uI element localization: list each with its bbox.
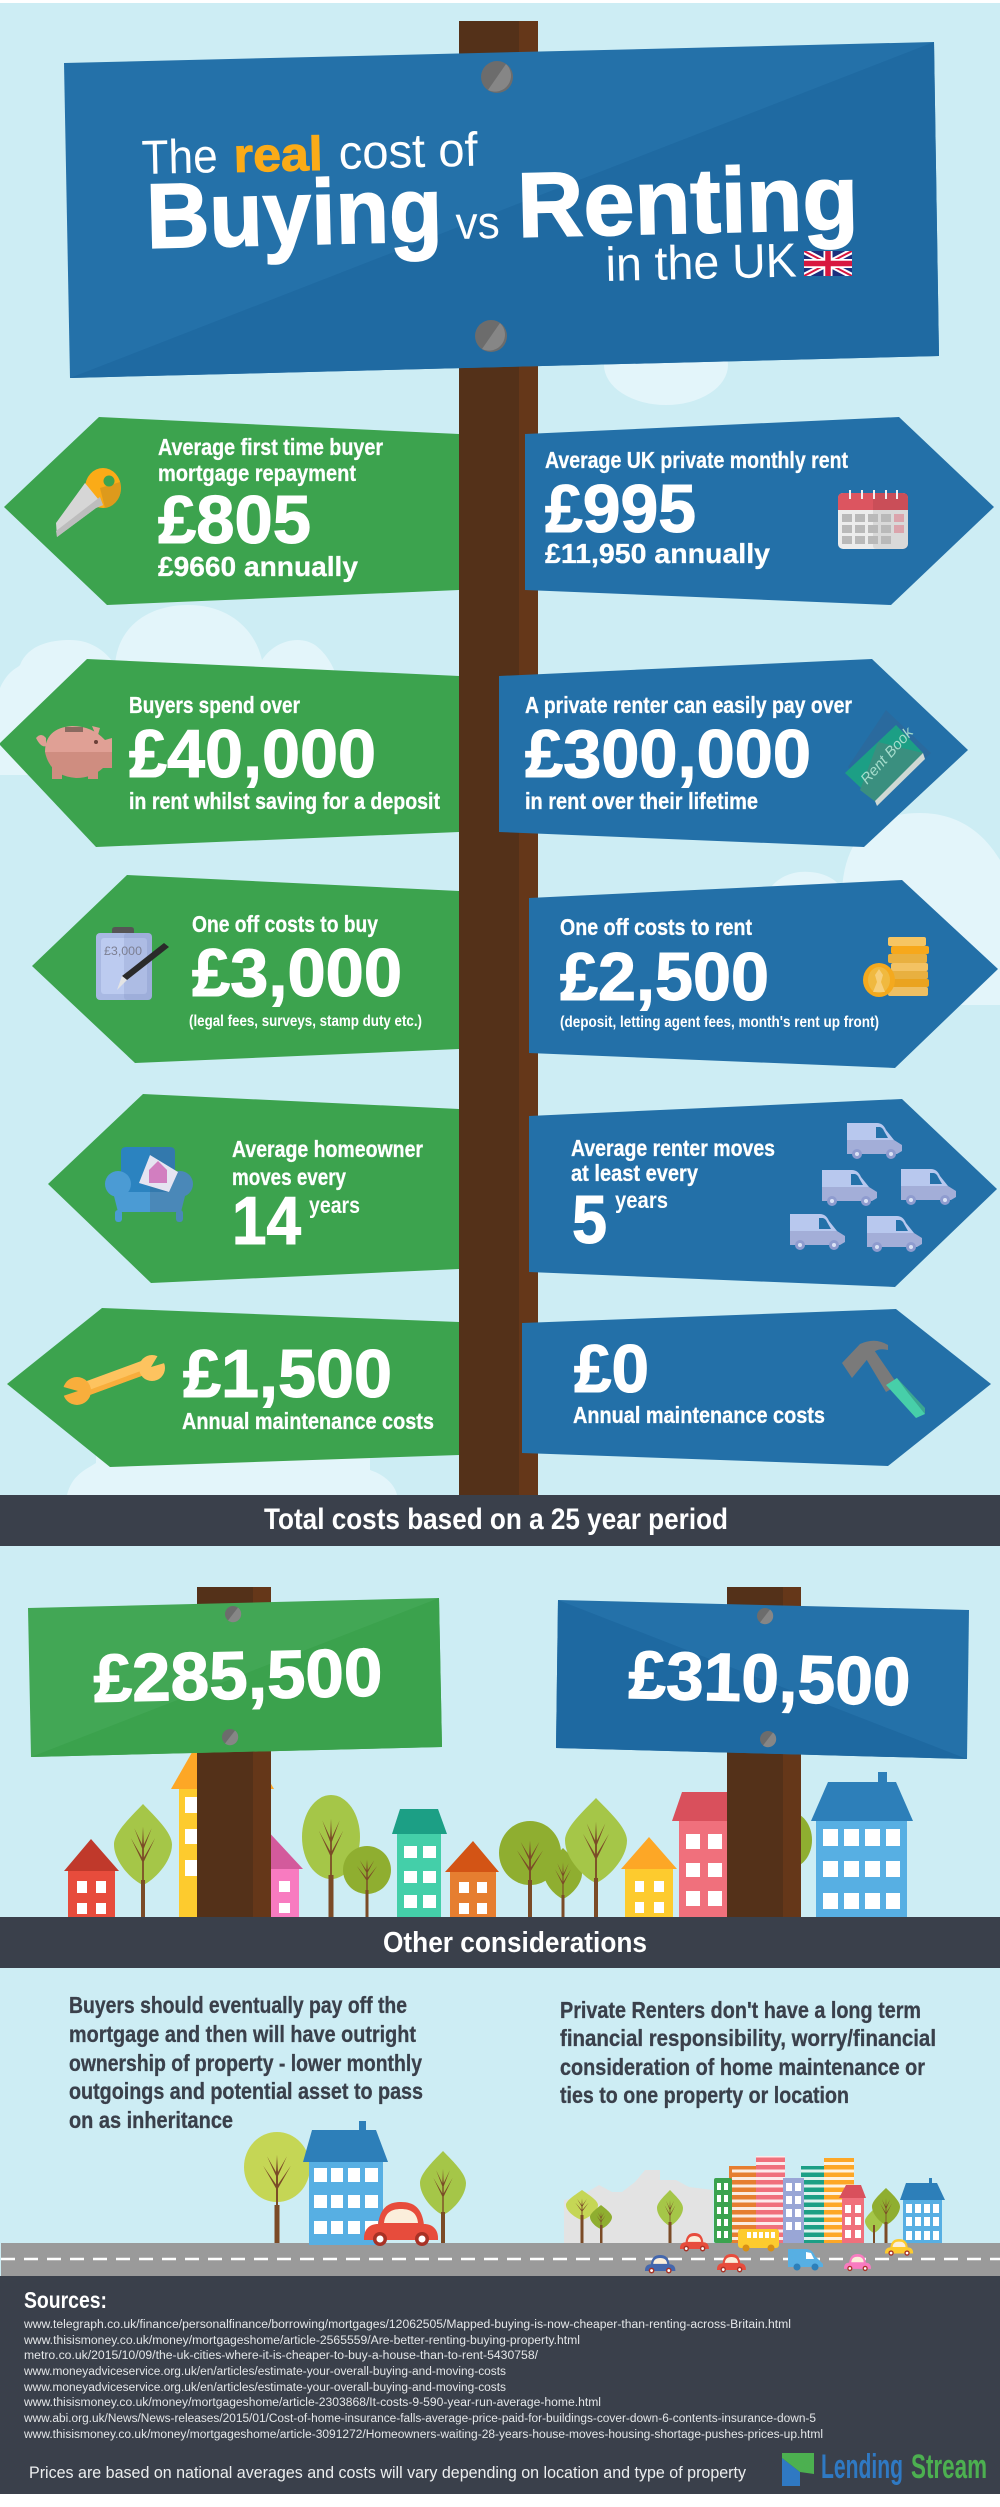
house: orange	[445, 1841, 499, 1917]
text: (deposit, letting agent fees, month's rent up front)	[560, 1014, 879, 1031]
source list: www.thisismoney.co.uk/money/mortgageshome/article-3091272/Homeowners-waiting-28-years-house-moves-housing-shortage-pushes-prices-up.html	[23, 2429, 823, 2441]
text	[129, 692, 440, 814]
arrow sign	[7, 1308, 459, 1467]
arrow sign	[48, 1094, 459, 1283]
icon: armchair with pillow	[105, 1147, 193, 1222]
panel: buyers spend on rent	[0, 659, 459, 847]
source list: metro.co.uk/2015/10/09/the-uk-cities-where-it-is-cheaper-to-buy-a-house-than-to-rent-5430758/	[24, 2350, 539, 2362]
banner: other considerations heading	[0, 1917, 1000, 1968]
text block: buyers consideration: on as inheritance	[69, 2107, 233, 2133]
house: yellow	[621, 1837, 677, 1917]
icon: piggy bank	[36, 726, 112, 779]
icon: clipboard and pen: £3,000	[104, 944, 142, 958]
arrow sign	[522, 1309, 991, 1466]
text	[560, 914, 879, 1031]
text: £300,000	[525, 716, 811, 792]
text	[525, 692, 852, 814]
sign: renting total	[556, 1600, 969, 1759]
car: small red	[680, 2233, 709, 2251]
text: Annual maintenance costs	[573, 1402, 825, 1428]
text block: renters consideration	[560, 1997, 936, 2108]
logo: Lending Stream: Lending	[821, 2448, 903, 2486]
tree	[499, 1821, 561, 1917]
text	[232, 1136, 423, 1259]
text block: buyers consideration	[69, 1992, 423, 2133]
text: Average homeowner	[232, 1136, 423, 1162]
trees by blue house	[865, 2188, 900, 2243]
house: pink	[230, 1828, 303, 1917]
title text: vs	[455, 196, 500, 249]
logo: Lending Stream	[782, 2448, 987, 2486]
text block: renters consideration: ties to one property or location	[560, 2082, 849, 2108]
source list: www.moneyadviceservice.org.uk/en/articles/estimate-your-overall-buying-and-moving-costs	[23, 2382, 506, 2394]
city buildings	[714, 2156, 866, 2243]
cloud: left middle	[0, 605, 350, 775]
cloud: below title sign	[604, 325, 728, 405]
arrow sign	[32, 875, 459, 1063]
text: One off costs to rent	[560, 914, 752, 940]
text: Average UK private monthly rent	[545, 447, 848, 473]
car: small navy	[645, 2255, 675, 2273]
text: One off costs to buy	[192, 911, 378, 937]
grey city silhouette	[564, 2170, 713, 2243]
panel: renter maintenance	[522, 1309, 991, 1466]
arrow sign	[525, 417, 994, 605]
bus: yellow	[738, 2229, 779, 2252]
tree: large left	[244, 2132, 310, 2245]
text	[545, 447, 848, 569]
road	[1, 2243, 1000, 2276]
text: £805	[158, 482, 311, 558]
tree	[565, 1798, 627, 1917]
post: right	[727, 1587, 801, 1917]
screws	[222, 1606, 241, 1745]
house: yellow tall	[171, 1700, 274, 1917]
text: moves every	[232, 1164, 346, 1190]
sign board	[64, 42, 939, 378]
value: £310,500	[628, 1637, 912, 1720]
screw top	[481, 61, 513, 93]
city trees	[566, 2190, 683, 2243]
text	[571, 1135, 775, 1258]
panel: renter moves	[529, 1099, 997, 1287]
text: years	[309, 1192, 360, 1218]
tree	[544, 1848, 582, 1917]
title sign	[64, 42, 939, 378]
car: small yellow	[885, 2239, 913, 2256]
title text: Buying	[145, 159, 443, 268]
title text: The	[141, 130, 218, 185]
text	[573, 1331, 825, 1428]
arrow sign	[529, 880, 998, 1068]
board	[28, 1598, 442, 1757]
icon: vans	[790, 1123, 956, 1252]
car: small pink	[844, 2254, 871, 2271]
post: left	[197, 1587, 271, 1917]
text: A private renter can easily pay over	[525, 692, 852, 718]
screws	[757, 1608, 776, 1747]
car: small red lower	[717, 2254, 746, 2272]
value: £285,500	[93, 1634, 383, 1717]
text block: buyers consideration: ownership of property - lower monthly	[69, 2050, 422, 2076]
icon: rent book	[845, 710, 931, 806]
panel: renter lifetime cost	[499, 659, 968, 847]
icon: hammer	[842, 1341, 925, 1418]
house: coral	[672, 1792, 739, 1917]
source list: www.thisismoney.co.uk/money/mortgageshome/article-2565559/Are-better-renting-buying-property.html	[23, 2335, 580, 2347]
text: (legal fees, surveys, stamp duty etc.)	[189, 1013, 422, 1030]
text block: buyers consideration: mortgage and then will have outright	[69, 2021, 416, 2047]
icon: calendar	[838, 490, 908, 549]
text block: buyers consideration: outgoings and potential asset to pass	[69, 2078, 423, 2104]
text: years	[615, 1187, 668, 1213]
title text	[141, 124, 859, 292]
text: £40,000	[129, 716, 376, 792]
text: in rent over their lifetime	[525, 788, 758, 814]
title text: real	[233, 128, 323, 183]
panel: buyer maintenance	[7, 1308, 459, 1467]
arrow sign	[529, 1099, 997, 1287]
text block: buyers consideration: Buyers should eventually pay off the	[69, 1992, 407, 2018]
source list: www.abi.org.uk/News/News-releases/2015/01/Cost-of-home-insurance-falls-average-price-paid-for-buildings-cover-down-6-contents-insurance-down-5	[23, 2413, 816, 2425]
text	[182, 1336, 434, 1434]
source list: www.telegraph.co.uk/finance/personalfinance/borrowing/mortgages/12062505/Mapped-buying-is-now-cheaper-than-renting-across-Britain.html	[23, 2319, 791, 2331]
panel: buyer mortgage repayment	[4, 417, 459, 605]
icon: wrench	[60, 1352, 168, 1405]
source list: www.thisismoney.co.uk/money/mortgageshome/article-2303868/It-costs-9-590-year-run-average-home.html	[23, 2397, 601, 2409]
banner: total costs heading	[0, 1495, 1000, 1546]
cloud: lower left	[67, 1440, 397, 1495]
text block: renters consideration: consideration of home maintenance or	[560, 2054, 925, 2080]
panel: private monthly rent	[525, 417, 994, 605]
title text: Renting	[516, 147, 859, 257]
tree	[302, 1795, 360, 1917]
screw bottom	[475, 320, 507, 352]
tree	[343, 1846, 391, 1917]
arrow sign	[4, 417, 459, 605]
text: 5	[572, 1182, 607, 1258]
sign: buying total	[28, 1598, 442, 1757]
title text: in the UK	[605, 235, 797, 292]
text: Average first time buyer	[158, 434, 383, 460]
skyline illustration	[64, 1700, 913, 1917]
text	[189, 911, 422, 1030]
text	[158, 434, 383, 582]
tree	[114, 1804, 172, 1917]
text: £1,500	[183, 1336, 392, 1412]
house: teal	[392, 1809, 447, 1917]
text: £0	[574, 1331, 649, 1407]
text: £2,500	[560, 939, 769, 1015]
text: £9660 annually	[158, 551, 358, 582]
text: in rent whilst saving for a deposit	[129, 788, 440, 814]
road scene	[1, 2121, 1000, 2276]
icon: UK flag	[804, 251, 852, 276]
road markings	[1, 2258, 1000, 2260]
banner: total costs heading: Total costs based on a 25 year period	[264, 1503, 728, 1536]
text block: renters consideration: financial responsibility, worry/financial	[560, 2025, 936, 2051]
text: Annual maintenance costs	[182, 1408, 434, 1434]
disclaimer: Prices are based on national averages and costs will vary depending on location and type of property	[29, 2463, 746, 2482]
heading: Sources:	[24, 2287, 107, 2313]
city house: blue	[900, 2178, 945, 2243]
source list	[23, 2319, 823, 2441]
text: 14	[232, 1183, 301, 1259]
title text: cost of	[338, 124, 479, 180]
van: light blue	[788, 2249, 823, 2270]
tree behind post	[768, 1812, 812, 1868]
icon: coins	[863, 937, 929, 997]
icon: clipboard and pen	[96, 927, 169, 1000]
board	[556, 1600, 969, 1759]
text block: renters consideration: Private Renters don't have a long term	[560, 1997, 921, 2023]
sources panel	[0, 2276, 1000, 2494]
car: large red	[364, 2202, 438, 2246]
text: £3,000	[192, 935, 402, 1011]
house: blue	[811, 1772, 913, 1917]
text: £995	[545, 471, 696, 547]
cloud: right middle	[765, 813, 1000, 1005]
banner: other considerations heading: Other considerations	[383, 1927, 647, 1959]
house: red	[64, 1839, 119, 1917]
text: Average renter moves	[571, 1135, 775, 1161]
icon: rent book: Rent Book	[857, 723, 918, 788]
panel: homeowner moves	[48, 1094, 459, 1283]
arrow sign	[499, 659, 968, 847]
main signpost	[459, 21, 538, 1495]
panel: one off costs to buy	[32, 875, 459, 1063]
text: mortgage repayment	[158, 460, 356, 486]
tree: right of building	[420, 2151, 466, 2245]
text: Buyers spend over	[129, 692, 300, 718]
source list: www.moneyadviceservice.org.uk/en/articles/estimate-your-overall-buying-and-moving-costs	[23, 2366, 506, 2378]
panel: one off costs to rent	[529, 880, 998, 1068]
text: at least every	[571, 1160, 698, 1186]
panel background	[0, 2276, 1000, 2494]
icon: key	[56, 468, 121, 537]
arrow sign	[0, 659, 459, 847]
building: blue apartments	[303, 2121, 388, 2245]
text: £11,950 annually	[545, 538, 770, 569]
